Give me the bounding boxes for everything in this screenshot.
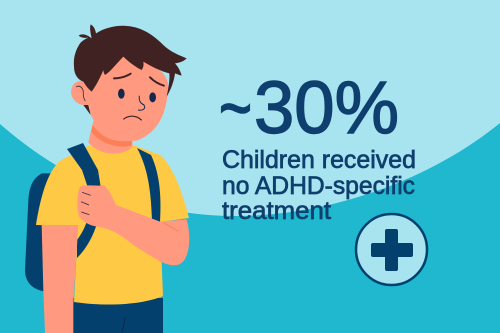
right forearm and hand xyxy=(77,185,189,265)
icon ring xyxy=(356,214,427,285)
background teal curve xyxy=(0,123,500,333)
caption xyxy=(222,146,416,225)
statistic number: 30% xyxy=(254,66,399,149)
illustration: sad boy with backpack xyxy=(25,24,189,333)
icon: medical plus xyxy=(356,214,427,285)
finger lines xyxy=(81,192,91,215)
statistic xyxy=(219,66,399,149)
icon cross xyxy=(371,229,413,271)
hair behind ear xyxy=(83,105,91,115)
t-shirt xyxy=(36,146,189,304)
backpack strap right xyxy=(137,148,161,222)
elbow crease xyxy=(163,223,179,231)
backpack xyxy=(25,173,60,292)
trouser seam xyxy=(122,317,125,333)
mouth xyxy=(123,116,142,120)
trousers xyxy=(72,298,163,333)
right eye xyxy=(149,92,156,102)
caption line 1: Children received xyxy=(222,146,416,174)
neck xyxy=(88,118,133,154)
left eyebrow xyxy=(114,74,131,78)
caption line 2: no ADHD-specific xyxy=(222,172,415,200)
nose xyxy=(138,96,145,110)
caption line 3: treatment xyxy=(222,197,331,225)
left eye xyxy=(118,89,125,99)
neck shadow xyxy=(91,125,132,147)
statistic tilde: ~ xyxy=(219,66,252,149)
head xyxy=(71,24,187,141)
ear xyxy=(71,81,90,105)
face xyxy=(88,57,168,141)
backpack strap left xyxy=(67,143,102,258)
left arm xyxy=(42,225,78,333)
hair xyxy=(74,24,187,97)
right eyebrow xyxy=(150,77,164,86)
